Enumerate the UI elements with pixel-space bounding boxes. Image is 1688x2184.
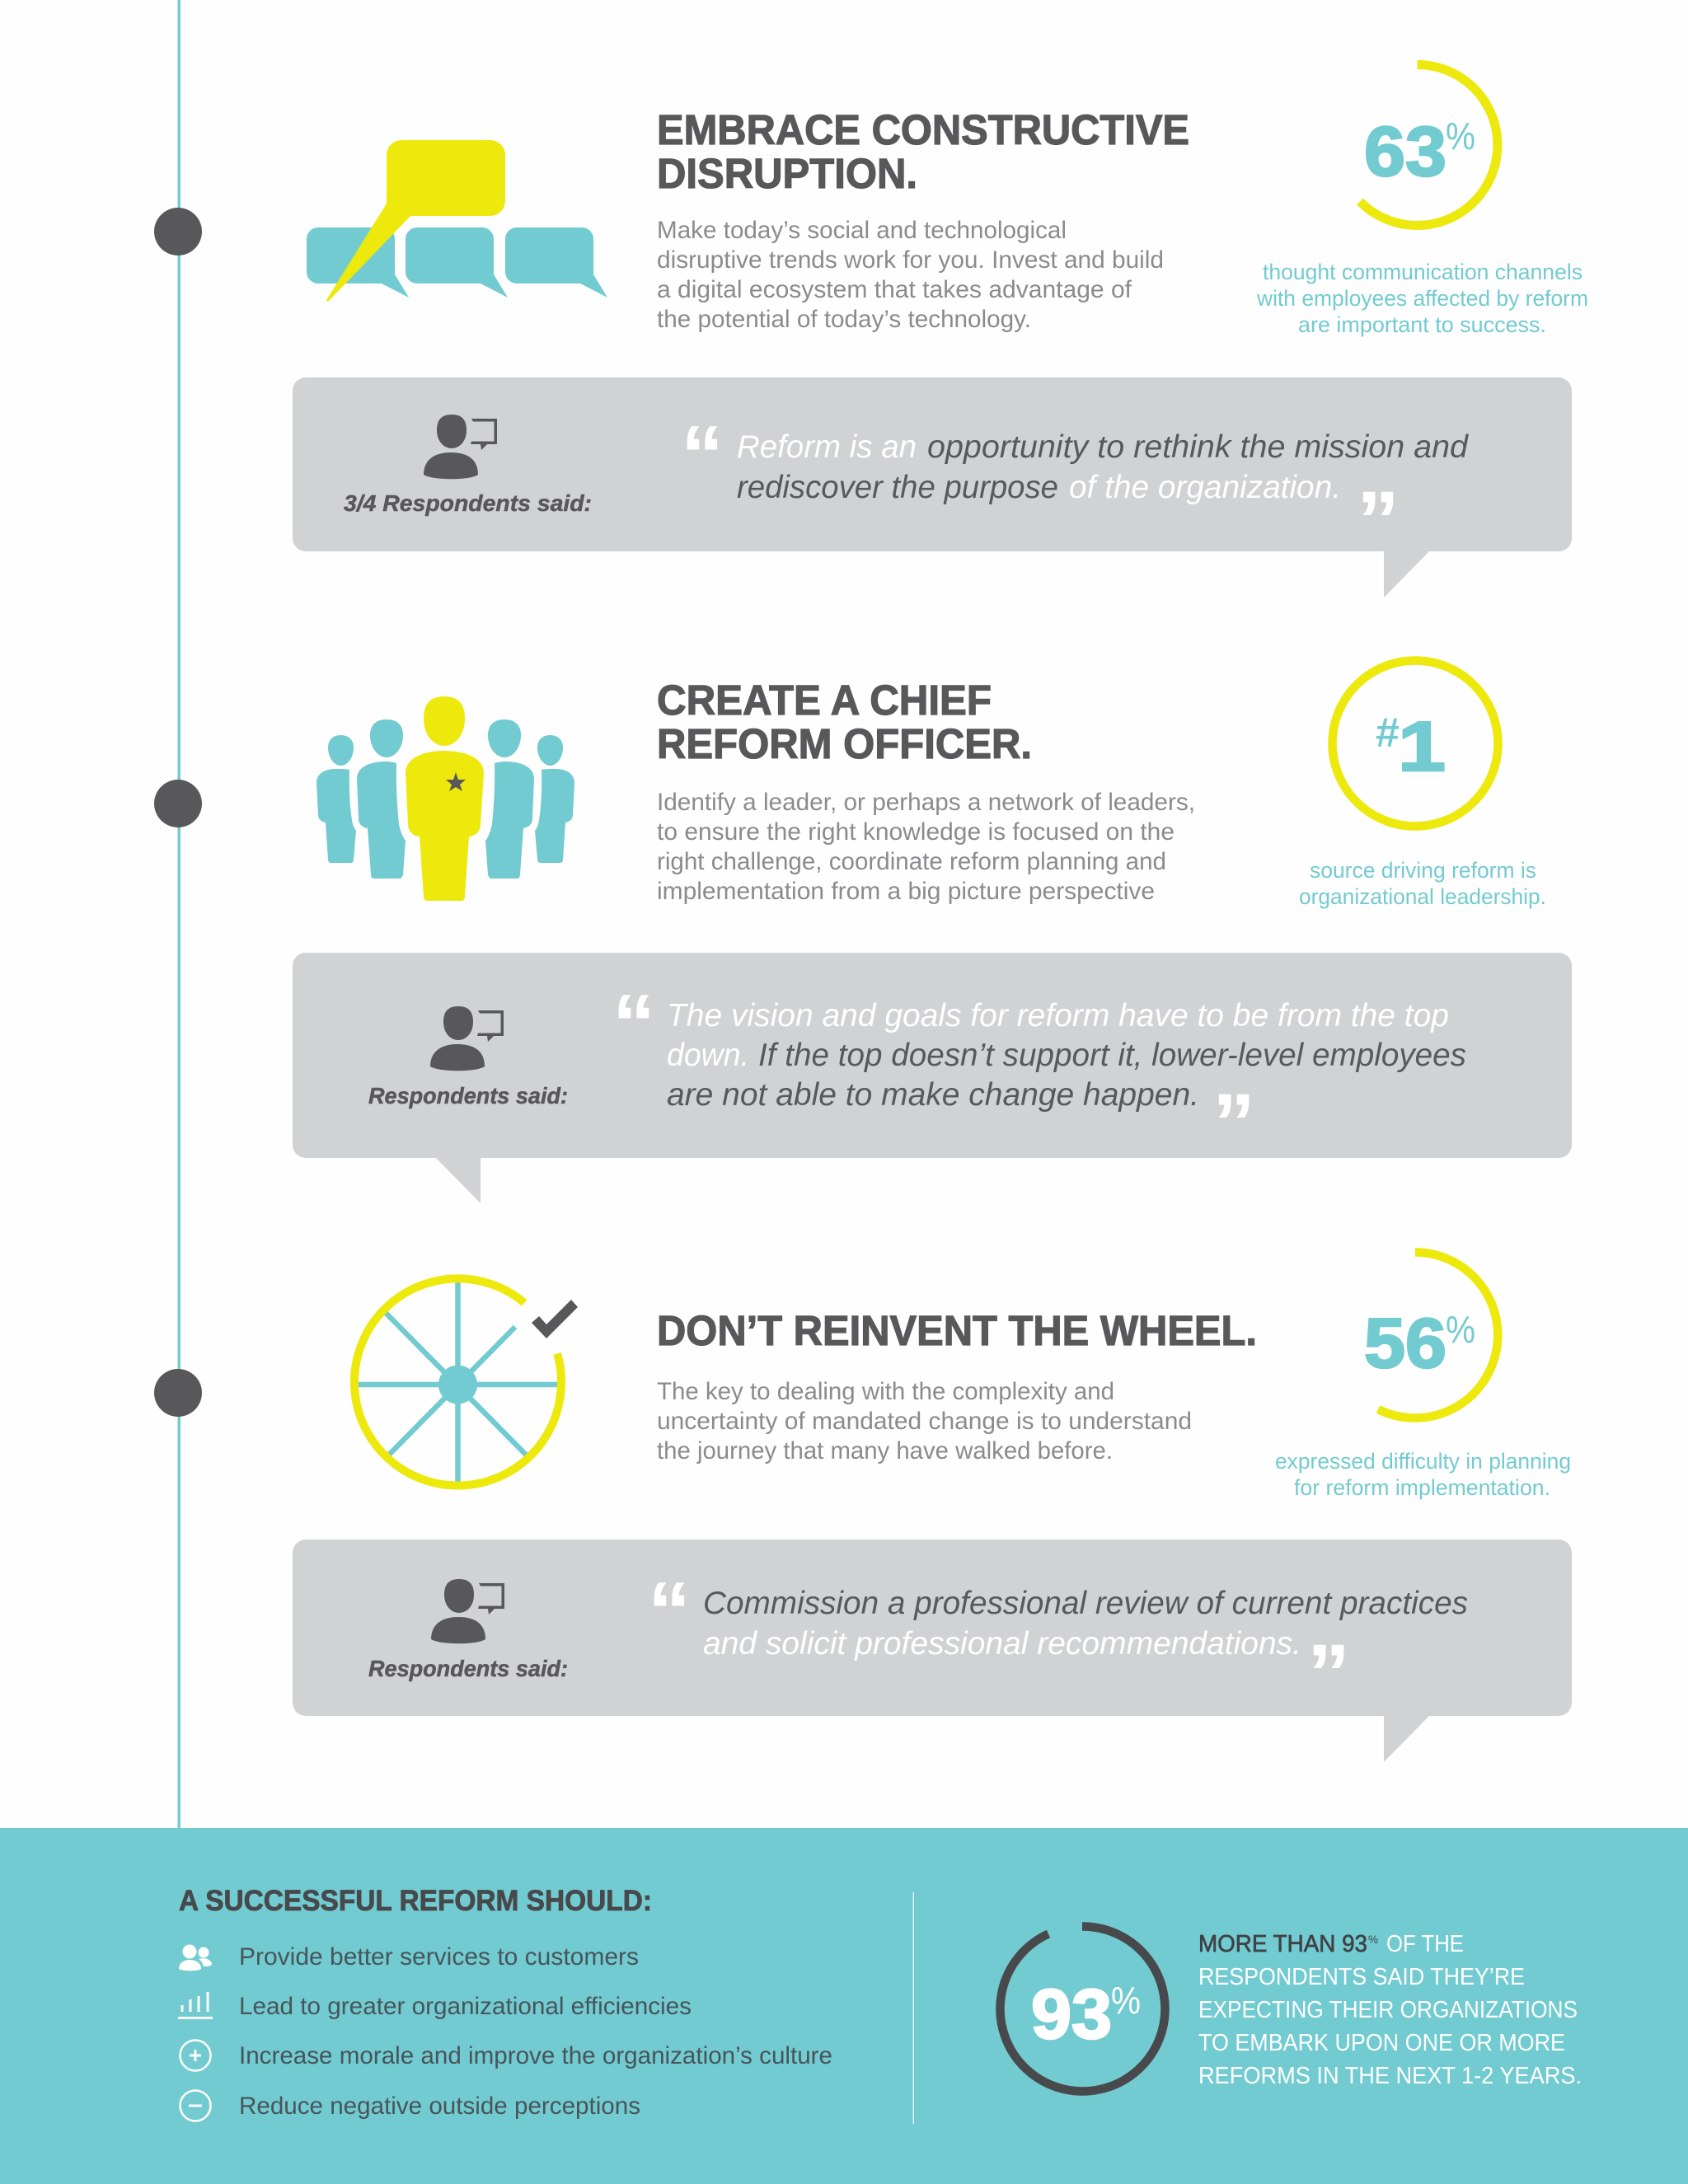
quote text 2: The vision and goals for reform have to be from the top (667, 998, 1449, 1033)
icon: respondent 1 (424, 415, 497, 479)
text: more than 93 percent: MORE THAN 93 (1198, 1931, 1367, 1957)
icon: wheel with checkmark (354, 1278, 578, 1485)
text: more than 93 percent: TO EMBARK UPON ONE OR MORE (1198, 2030, 1565, 2056)
stat caption: 63 percent (1256, 260, 1588, 337)
quotation marks 1 (681, 409, 1400, 567)
body text: wheel: The key to dealing with the complexity and (657, 1378, 1114, 1405)
panel: quote 1 (293, 377, 1572, 598)
timeline with three section markers (154, 0, 202, 1828)
icon: respondent 3 (431, 1579, 504, 1643)
icon: people (179, 1945, 212, 1971)
body text: disruption: disruptive trends work for you. Invest and build (657, 246, 1164, 274)
icon: speech bubbles (307, 140, 607, 302)
quote text 1 (737, 429, 1469, 505)
text: more than 93 percent: RESPONDENTS SAID THEY’RE (1198, 1964, 1525, 1990)
body text: chief reform officer: implementation from a big picture perspective (657, 878, 1155, 905)
heading: create a chief reform officer: CREATE A CHIEF (657, 677, 992, 724)
stat caption: 56 percent (1275, 1449, 1571, 1500)
text: more than 93 percent: OF THE (1386, 1931, 1464, 1957)
stat: 63 percent ring: % (1446, 115, 1475, 157)
label: respondents said: Respondents said: (368, 1656, 568, 1681)
heading: don't reinvent the wheel: DON’T REINVENT THE WHEEL. (657, 1307, 1257, 1354)
stat caption: number one (1299, 858, 1546, 909)
quote text 2: down. (667, 1038, 749, 1073)
panel: footer (0, 1828, 1688, 2184)
list item: services: Provide better services to customers (239, 1943, 639, 1971)
body text: disruption (657, 217, 1164, 333)
body text: disruption: a digital ecosystem that takes advantage of (657, 276, 1132, 303)
list item: efficiencies: Lead to greater organizational efficiencies (239, 1993, 692, 2020)
list item: morale: Increase morale and improve the organization’s culture (239, 2042, 832, 2069)
quotation marks 3: ” (1307, 1628, 1350, 1720)
quote text 1: opportunity to rethink the mission and (927, 429, 1469, 465)
icon: minus (180, 2090, 211, 2121)
heading: embrace constructive disruption (657, 106, 1189, 197)
stat: 93 percent ring (1000, 1926, 1165, 2091)
quotation marks 2: ” (1212, 1077, 1255, 1169)
icon: respondent 2 (430, 1006, 504, 1071)
body text: chief reform officer (657, 789, 1195, 905)
body text: wheel (657, 1378, 1192, 1465)
list item: perceptions: Reduce negative outside perceptions (239, 2093, 640, 2120)
quote text 3: Commission a professional review of current practices (703, 1586, 1468, 1621)
quotation marks 2 (612, 977, 1255, 1169)
stat: 56 percent ring: % (1446, 1308, 1475, 1351)
heading: create a chief reform officer: REFORM OFFICER. (657, 720, 1032, 767)
body text: chief reform officer: Identify a leader, or perhaps a network of leaders, (657, 789, 1195, 816)
stat caption: number one: organizational leadership. (1299, 884, 1546, 909)
quote text 1: Reform is an (737, 429, 917, 465)
body text: chief reform officer: right challenge, coordinate reform planning and (657, 848, 1166, 875)
label: respondents said: Respondents said: (368, 1083, 568, 1108)
quotation marks 3 (648, 1565, 1350, 1720)
stat caption: 56 percent: expressed difficulty in planning (1275, 1449, 1571, 1474)
quotation marks 1: “ (681, 409, 724, 501)
quote text 2: are not able to make change happen. (667, 1077, 1199, 1113)
text: more than 93 percent: % (1368, 1933, 1378, 1946)
quote text 1: rediscover the purpose (737, 470, 1058, 505)
heading: embrace constructive disruption: DISRUPTION. (657, 150, 917, 197)
stat: number one ring: 1 (1398, 708, 1446, 786)
stat: number one ring: # (1376, 710, 1400, 756)
heading: embrace constructive disruption: EMBRACE CONSTRUCTIVE (657, 106, 1189, 153)
panel: quote 2 (293, 953, 1572, 1203)
body text: wheel: uncertainty of mandated change is to understand (657, 1408, 1192, 1435)
quote text 2 (667, 998, 1466, 1113)
quotation marks 3: “ (648, 1565, 691, 1657)
icon: plus (180, 2041, 211, 2070)
text: more than 93 percent (1198, 1931, 1582, 2089)
quote text 3: and solicit professional recommendations. (703, 1626, 1301, 1661)
text: more than 93 percent: EXPECTING THEIR ORGANIZATIONS (1198, 1997, 1578, 2023)
stat caption: 56 percent: for reform implementation. (1294, 1475, 1550, 1500)
stat caption: 63 percent: are important to success. (1298, 312, 1546, 337)
stat: 56 percent ring: 56 (1364, 1305, 1447, 1383)
heading: a successful reform should: A SUCCESSFUL REFORM SHOULD: (179, 1885, 652, 1917)
heading: create a chief reform officer (657, 677, 1032, 767)
body text: wheel: the journey that many have walked before. (657, 1437, 1113, 1465)
label: 3/4 respondents said: 3/4 Respondents said: (344, 490, 592, 516)
stat caption: 63 percent: thought communication channels (1263, 260, 1582, 284)
stat caption: number one: source driving reform is (1310, 858, 1536, 883)
icon: group of people with leader (316, 696, 574, 901)
stat: 63 percent ring: 63 (1364, 113, 1447, 191)
body text: chief reform officer: to ensure the right knowledge is focused on the (657, 818, 1175, 846)
quote text 2: If the top doesn’t support it, lower-level employees (758, 1038, 1466, 1073)
stat caption: 63 percent: with employees affected by reform (1256, 286, 1588, 311)
panel: quote 3 (293, 1540, 1572, 1762)
quote text 3 (703, 1586, 1468, 1661)
quotation marks 1: ” (1357, 475, 1400, 567)
stat: number one ring (1332, 661, 1498, 826)
stat: 63 percent ring (1360, 64, 1498, 225)
quote text 1: of the organization. (1069, 470, 1341, 505)
icon: bar chart (178, 1992, 213, 2019)
stat: 93 percent ring: 93 (1031, 1975, 1112, 2054)
quotation marks 2: “ (612, 977, 655, 1070)
stat: 56 percent ring (1364, 1253, 1498, 1418)
text: more than 93 percent: REFORMS IN THE NEXT 1-2 YEARS. (1198, 2063, 1582, 2089)
body text: disruption: Make today’s social and technological (657, 217, 1067, 244)
body text: disruption: the potential of today’s technology. (657, 306, 1031, 333)
stat: 93 percent ring: % (1111, 1979, 1141, 2022)
